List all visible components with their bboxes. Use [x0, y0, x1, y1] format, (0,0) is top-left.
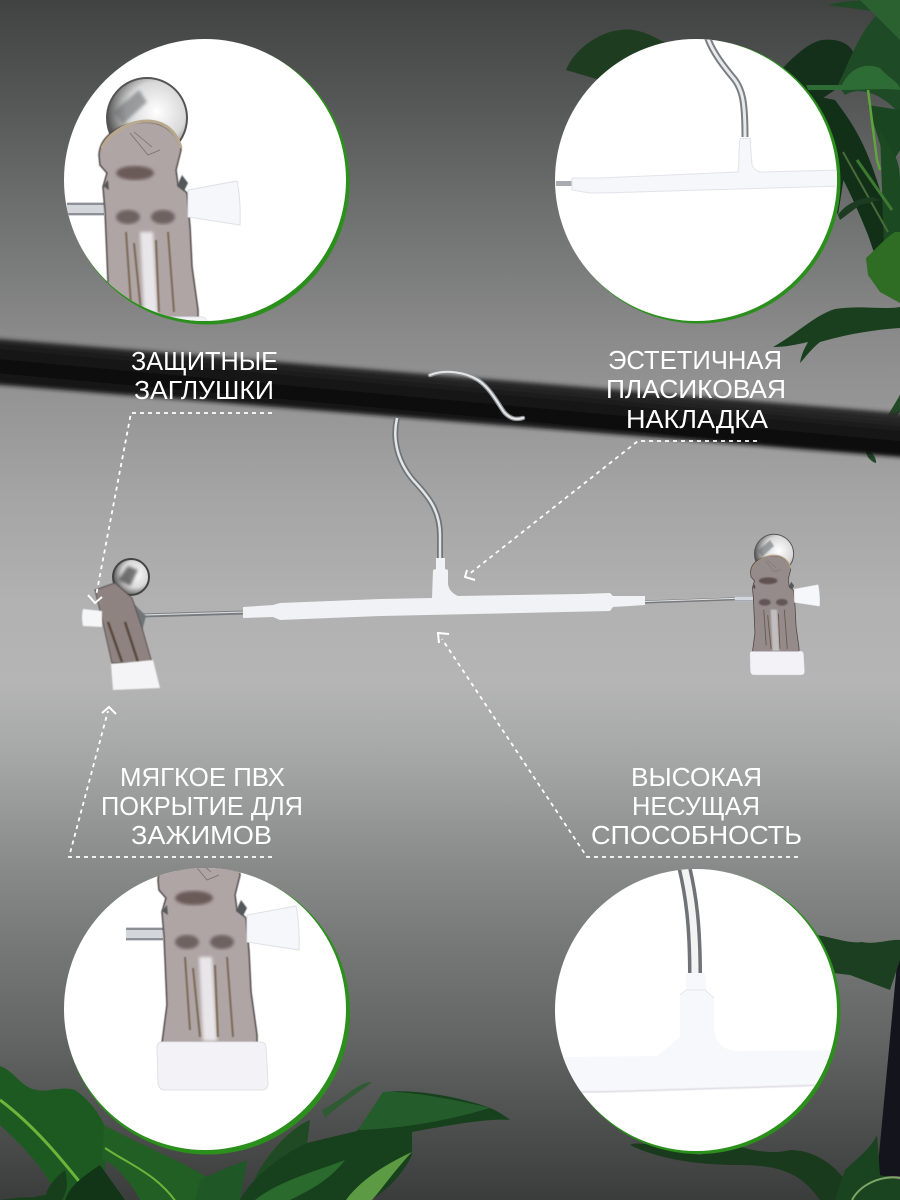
plant: bottom right leaves	[630, 935, 900, 1200]
label: aesthetic plastic overlay: НАКЛАДКА	[626, 406, 768, 434]
plant: top right leaves	[566, 0, 900, 463]
hanger white bar	[243, 558, 645, 620]
label: high load capacity	[591, 764, 802, 850]
label: soft PVC coating: ПОКРЫТИЕ ДЛЯ	[101, 793, 303, 821]
label: soft PVC coating	[101, 764, 303, 850]
label: aesthetic plastic overlay: ПЛАСИКОВАЯ	[606, 376, 786, 404]
label: soft PVC coating: ЗАЖИМОВ	[131, 822, 272, 850]
label: soft PVC coating: МЯГКОЕ ПВХ	[120, 764, 285, 792]
panel: plastic overlay close-up	[555, 36, 840, 321]
plant: bottom left leaves	[0, 1066, 510, 1200]
hanger metal rods	[143, 598, 760, 616]
black clothes rail	[0, 334, 900, 462]
arrow: to bar	[438, 633, 798, 857]
hanger	[143, 372, 760, 620]
label: protective caps	[131, 348, 278, 405]
panel: load capacity close-up	[550, 866, 845, 1151]
left clip	[82, 559, 160, 690]
panel: protective cap close-up	[64, 39, 346, 321]
arrow: to protective cap	[88, 413, 272, 603]
label: aesthetic plastic overlay: ЭСТЕТИЧНАЯ	[608, 347, 782, 375]
panel: soft PVC pad close-up	[64, 868, 346, 1150]
hanger hook over rail	[430, 372, 523, 419]
label: protective caps: ЗАГЛУШКИ	[134, 377, 274, 405]
green ring: top left	[66, 40, 350, 324]
label: high load capacity: СПОСОБНОСТЬ	[591, 822, 802, 850]
arrow: to clip pad	[69, 707, 272, 857]
green ring: bottom right	[556, 870, 840, 1154]
green ring: bottom left	[65, 870, 350, 1154]
label: protective caps: ЗАЩИТНЫЕ	[131, 348, 278, 376]
arrow: to plastic overlay	[465, 441, 757, 580]
label: high load capacity: ВЫСОКАЯ	[631, 764, 762, 792]
label: high load capacity: НЕСУЩАЯ	[632, 793, 760, 821]
green ring: top right	[556, 40, 840, 324]
label: aesthetic plastic overlay	[606, 347, 786, 434]
right clip	[735, 534, 820, 675]
hanger neck wire	[395, 418, 440, 560]
black pole at lower right	[877, 953, 900, 1176]
